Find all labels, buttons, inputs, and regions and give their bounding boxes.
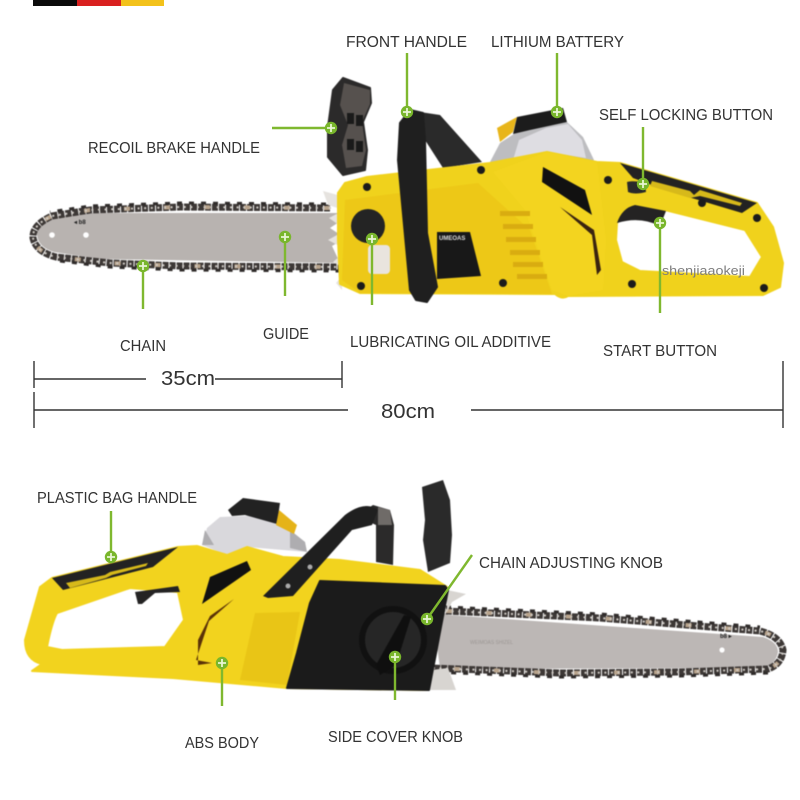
- rating label: [437, 232, 481, 279]
- oil window: [368, 245, 390, 274]
- dimension: 35cm: [34, 361, 342, 390]
- screws: [357, 166, 768, 292]
- label: guide: [263, 231, 309, 343]
- label: plastic bag handle: PLASTIC BAG HANDLE: [37, 490, 197, 507]
- label: chain adjusting knob: CHAIN ADJUSTING KNOB: [479, 555, 663, 572]
- vents: [500, 211, 547, 279]
- window bottom: [202, 561, 251, 604]
- chain top: [33, 203, 340, 271]
- battery: [490, 108, 594, 165]
- yellow body: [338, 152, 783, 298]
- label: self locking button: SELF LOCKING BUTTON: [599, 107, 773, 124]
- side knob: [359, 606, 427, 675]
- bumper spikes bottom: [430, 590, 466, 690]
- flag stripe: [33, 0, 164, 6]
- dimension: 35cm: 35cm: [161, 368, 215, 390]
- label: plastic bag handle: [37, 490, 197, 563]
- label: side cover knob: SIDE COVER KNOB: [328, 729, 463, 746]
- handle bar bottom: [263, 506, 378, 598]
- guide bar top: [37, 213, 345, 263]
- label: lubricating oil additive: LUBRICATING OIL ADDITIVE: [350, 334, 551, 351]
- label: guide: GUIDE: [263, 326, 309, 343]
- side cover: [287, 581, 448, 690]
- bumper spikes top: [323, 191, 347, 290]
- label: start button: START BUTTON: [603, 343, 717, 360]
- label: start button: [603, 217, 717, 360]
- watermark: shenjiaaokeji: [662, 263, 745, 278]
- dimension: 80cm: [34, 361, 783, 428]
- recoil brake handle: [328, 78, 371, 175]
- label: abs body: [185, 657, 259, 752]
- chainsaw bottom view: WEIMOAS SHIZEL: [470, 640, 513, 646]
- handle grip: [620, 163, 757, 213]
- label: lithium battery: LITHIUM BATTERY: [491, 34, 624, 51]
- black window: [542, 167, 592, 215]
- rear guard bottom: [350, 505, 394, 565]
- chainsaw bottom view: b8 ▸: [720, 634, 733, 640]
- chain bottom: [432, 607, 783, 677]
- start trigger: [617, 205, 666, 226]
- chainsaw bottom view: [25, 480, 783, 690]
- label: self locking button: [599, 107, 773, 190]
- rear guard: [420, 112, 482, 168]
- front handle: [398, 110, 437, 302]
- label: abs body: ABS BODY: [185, 735, 259, 752]
- rear grip: [52, 547, 178, 590]
- recoil handle bottom: [422, 480, 452, 572]
- body shading: [342, 183, 552, 294]
- label: lithium battery: [491, 34, 624, 118]
- label: chain: [120, 260, 166, 355]
- label: chain: CHAIN: [120, 338, 166, 355]
- oil knob: [351, 209, 385, 243]
- label: recoil brake handle: RECOIL BRAKE HANDLE: [88, 140, 260, 157]
- label: front handle: FRONT HANDLE: [346, 34, 467, 51]
- guide bar bottom: [432, 605, 778, 669]
- label: recoil brake handle: [88, 122, 337, 157]
- chainsaw top view: [33, 78, 783, 302]
- battery bottom: [202, 498, 307, 555]
- label: front handle: [346, 34, 467, 118]
- self locking button: [627, 181, 646, 194]
- rating label: UMEOAS: [439, 236, 465, 242]
- yellow body bottom: [25, 546, 447, 690]
- label: side cover knob: [328, 651, 463, 746]
- label: chain adjusting knob: [421, 555, 663, 625]
- label: lubricating oil additive: [350, 233, 551, 351]
- chainsaw top view: ◂ b8: [73, 220, 86, 226]
- trigger bottom: [135, 586, 180, 604]
- dimension: 80cm: 80cm: [381, 401, 435, 423]
